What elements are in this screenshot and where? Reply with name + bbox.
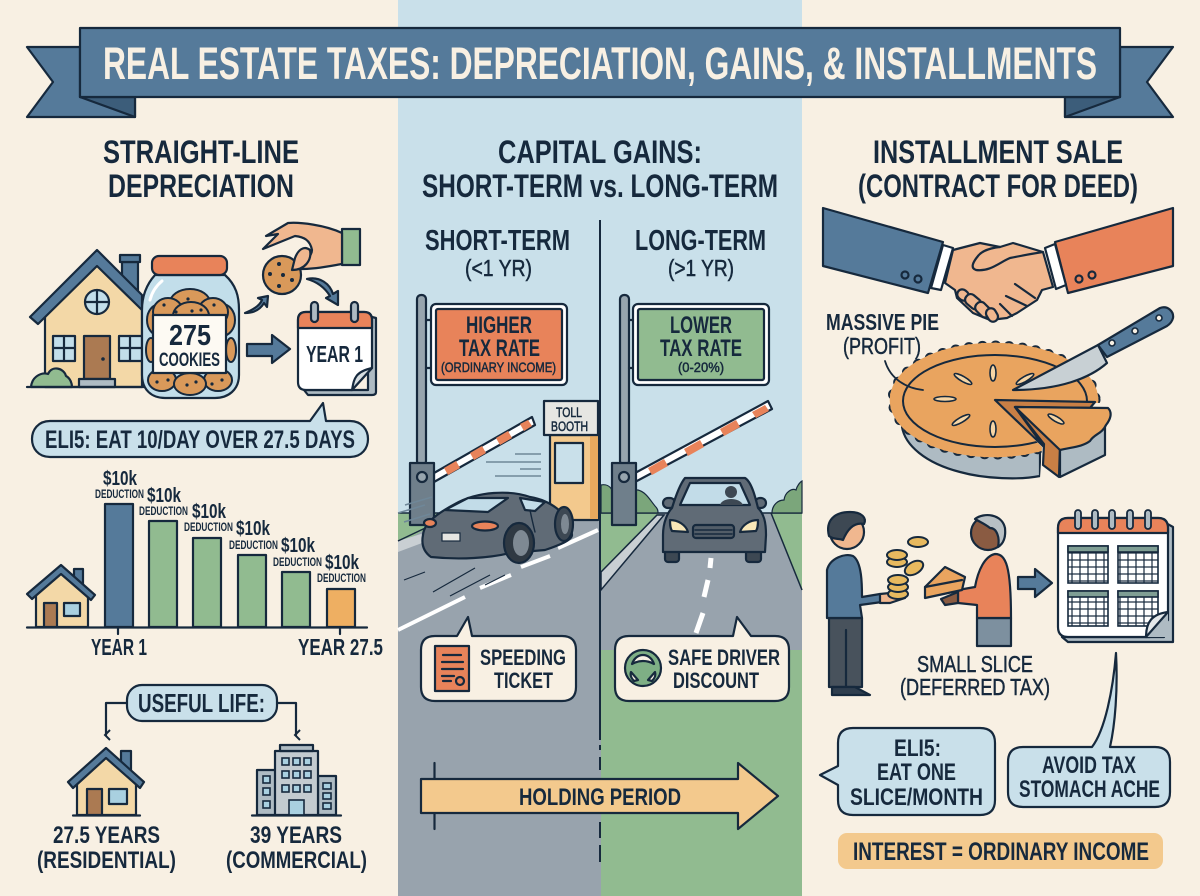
bar labels: DEDUCTION — [273, 557, 322, 569]
heading: capital gains: SHORT-TERM vs. LONG-TERM — [422, 168, 778, 204]
bar labels: $10k — [325, 552, 360, 574]
label: short-term — [425, 225, 570, 281]
axis labels — [91, 634, 383, 660]
road motion lines — [404, 568, 505, 596]
heading: straight-line depreciation: DEPRECIATION — [108, 168, 294, 204]
icon: toll booth: TOLL — [556, 405, 582, 420]
label: long-term — [635, 225, 766, 281]
callout: eat one slice per month: EAT ONE — [877, 759, 956, 786]
pie cut — [995, 400, 1112, 482]
left sleeve — [823, 208, 943, 293]
icon: sedan — [663, 478, 766, 562]
cuffs — [931, 245, 953, 290]
right road scene ground — [601, 481, 802, 896]
sign: higher tax rate: HIGHER — [466, 312, 532, 339]
icon: calendar year 1: YEAR 1 — [306, 341, 363, 367]
label: residential years — [37, 822, 176, 874]
icon: short-term gantry sign and barrier — [410, 295, 567, 525]
icon: ticket — [435, 646, 469, 691]
pie crust — [893, 346, 1095, 454]
panel: installment sale — [820, 134, 1173, 869]
icon: small house — [27, 565, 95, 627]
icon: toll booth: BOOTH — [551, 419, 588, 434]
icon: seller person — [941, 515, 1011, 646]
icon: commercial building — [252, 745, 341, 816]
label: commercial years — [226, 822, 367, 874]
label: small slice: (DEFERRED TAX) — [900, 674, 1050, 700]
icon: knife — [1013, 307, 1173, 390]
label: small slice — [900, 651, 1050, 700]
icon: hand with cookie — [263, 223, 360, 294]
bar labels: DEDUCTION — [95, 489, 144, 501]
icon: pie — [885, 307, 1173, 482]
cookie — [263, 256, 301, 294]
callout: eat one slice per month: SLICE/MONTH — [850, 784, 983, 811]
banner left tail — [27, 47, 135, 117]
bar chart: deductions — [27, 468, 383, 660]
heading: installment sale — [858, 134, 1138, 204]
callout: eli5 eat 10 per day: ELI5: EAT 10/DAY OVER 27.5 DAYS — [45, 426, 355, 454]
bar labels: $10k — [103, 468, 138, 490]
heading: capital gains: CAPITAL GAINS: — [498, 134, 702, 170]
sign: lower tax rate: LOWER — [670, 312, 732, 339]
bar labels: $10k — [147, 485, 182, 507]
callout: safe driver discount: DISCOUNT — [673, 668, 759, 693]
label: massive pie: (PROFIT) — [843, 333, 921, 359]
right sleeve — [1055, 208, 1173, 293]
bar labels: $10k — [236, 518, 271, 540]
icon: steering wheel — [625, 650, 661, 686]
label: commercial years: (COMMERCIAL) — [226, 847, 367, 874]
icon: pie slice — [925, 567, 965, 598]
left road scene ground — [398, 513, 601, 896]
barrier arm — [635, 401, 772, 482]
jar lid — [152, 256, 227, 275]
callout: eat one slice per month — [820, 728, 995, 815]
callout: useful life: USEFUL LIFE: — [138, 688, 265, 718]
callout: interest equals ordinary income — [838, 833, 1163, 869]
bar labels: DEDUCTION — [139, 506, 188, 518]
banner title — [27, 28, 1173, 117]
axis — [27, 627, 367, 634]
label: massive pie — [826, 309, 939, 359]
sign: higher tax rate: TAX RATE — [459, 335, 540, 362]
callout: eli5 eat 10 per day — [32, 403, 368, 457]
icon: buyer person — [827, 512, 905, 695]
callout: avoid tax stomach ache — [1008, 653, 1170, 807]
cookie chips — [155, 297, 224, 387]
heading: capital gains — [422, 134, 778, 204]
arrow: cookie to calendar — [307, 278, 338, 305]
pie pan — [902, 427, 1040, 478]
bar labels: DEDUCTION — [184, 522, 233, 534]
callout: speeding ticket: TICKET — [494, 668, 553, 693]
bar labels: $10k — [281, 535, 316, 557]
label: short-term: (<1 YR) — [465, 255, 532, 281]
callout: avoid tax stomach ache: AVOID TAX — [1042, 752, 1136, 779]
speed lines — [398, 454, 541, 522]
label: long-term: LONG-TERM — [635, 225, 766, 257]
banner right tail — [1065, 47, 1173, 117]
callout: safe driver discount: SAFE DRIVER — [668, 645, 780, 670]
label: small slice: SMALL SLICE — [917, 651, 1033, 677]
icon: residential house — [68, 748, 144, 816]
bar labels: DEDUCTION — [229, 540, 278, 552]
icon: coins — [887, 537, 928, 599]
icon: handshake — [823, 208, 1173, 324]
icon: calendar year 1 — [298, 302, 376, 395]
label: short-term: SHORT-TERM — [425, 225, 570, 257]
arrow: to calendar — [1018, 569, 1052, 597]
axis labels: YEAR 27.5 — [298, 634, 383, 660]
jar highlight — [150, 281, 162, 300]
sign: lower tax rate: (0-20%) — [678, 359, 724, 375]
label: massive pie: MASSIVE PIE — [826, 309, 939, 335]
icon: sports car — [422, 493, 573, 563]
jar label — [153, 315, 226, 373]
arrow: cookie from jar — [245, 296, 268, 313]
callout: safe driver discount — [615, 617, 789, 701]
axis labels: YEAR 1 — [91, 634, 147, 660]
arrow: holding period — [421, 763, 778, 829]
icon: long-term gantry sign and barrier — [612, 295, 772, 525]
icon: toll booth — [544, 401, 598, 520]
label: commercial years: 39 YEARS — [250, 822, 342, 849]
banner ribbon — [80, 28, 1120, 97]
label: long-term: (>1 YR) — [668, 255, 734, 281]
callout: eat one slice per month: ELI5: — [894, 735, 941, 762]
pie slice — [1015, 407, 1111, 477]
icon: cookie jar: 275 — [169, 320, 211, 352]
panel: straight-line depreciation — [27, 134, 383, 874]
arrow: jar to calendar — [247, 335, 290, 363]
heading: straight-line depreciation — [103, 134, 299, 204]
arrow: holding period: HOLDING PERIOD — [519, 784, 681, 811]
bar labels: DEDUCTION — [317, 573, 366, 585]
pie vents — [934, 365, 1035, 437]
callout: speeding ticket — [421, 617, 576, 701]
barrier arm — [434, 417, 535, 482]
heading: straight-line depreciation: STRAIGHT-LINE — [103, 134, 299, 170]
sign: higher tax rate — [431, 304, 567, 385]
sign: higher tax rate: (ORDINARY INCOME) — [441, 359, 556, 375]
callout: useful life — [106, 685, 296, 735]
pie leader line — [885, 361, 923, 390]
icon: cookie jar — [142, 256, 239, 398]
icon: monthly calendar — [1058, 510, 1173, 642]
heading: installment sale: INSTALLMENT SALE — [873, 134, 1123, 170]
sign: lower tax rate — [633, 304, 769, 385]
icon: house — [27, 250, 145, 387]
bar labels: $10k — [192, 501, 227, 523]
bars — [105, 504, 355, 627]
label: residential years: 27.5 YEARS — [53, 822, 160, 849]
panel: capital gains background — [398, 0, 802, 896]
sign: lower tax rate: TAX RATE — [660, 335, 742, 362]
callout: speeding ticket: SPEEDING — [480, 645, 566, 670]
icon: cookie jar: COOKIES — [159, 350, 220, 371]
divider — [599, 220, 601, 862]
hands — [945, 243, 1053, 320]
bar labels — [95, 468, 366, 585]
label: residential years: (RESIDENTIAL) — [37, 847, 176, 874]
panel: capital gains — [398, 134, 789, 862]
cookies in jar — [146, 289, 236, 395]
